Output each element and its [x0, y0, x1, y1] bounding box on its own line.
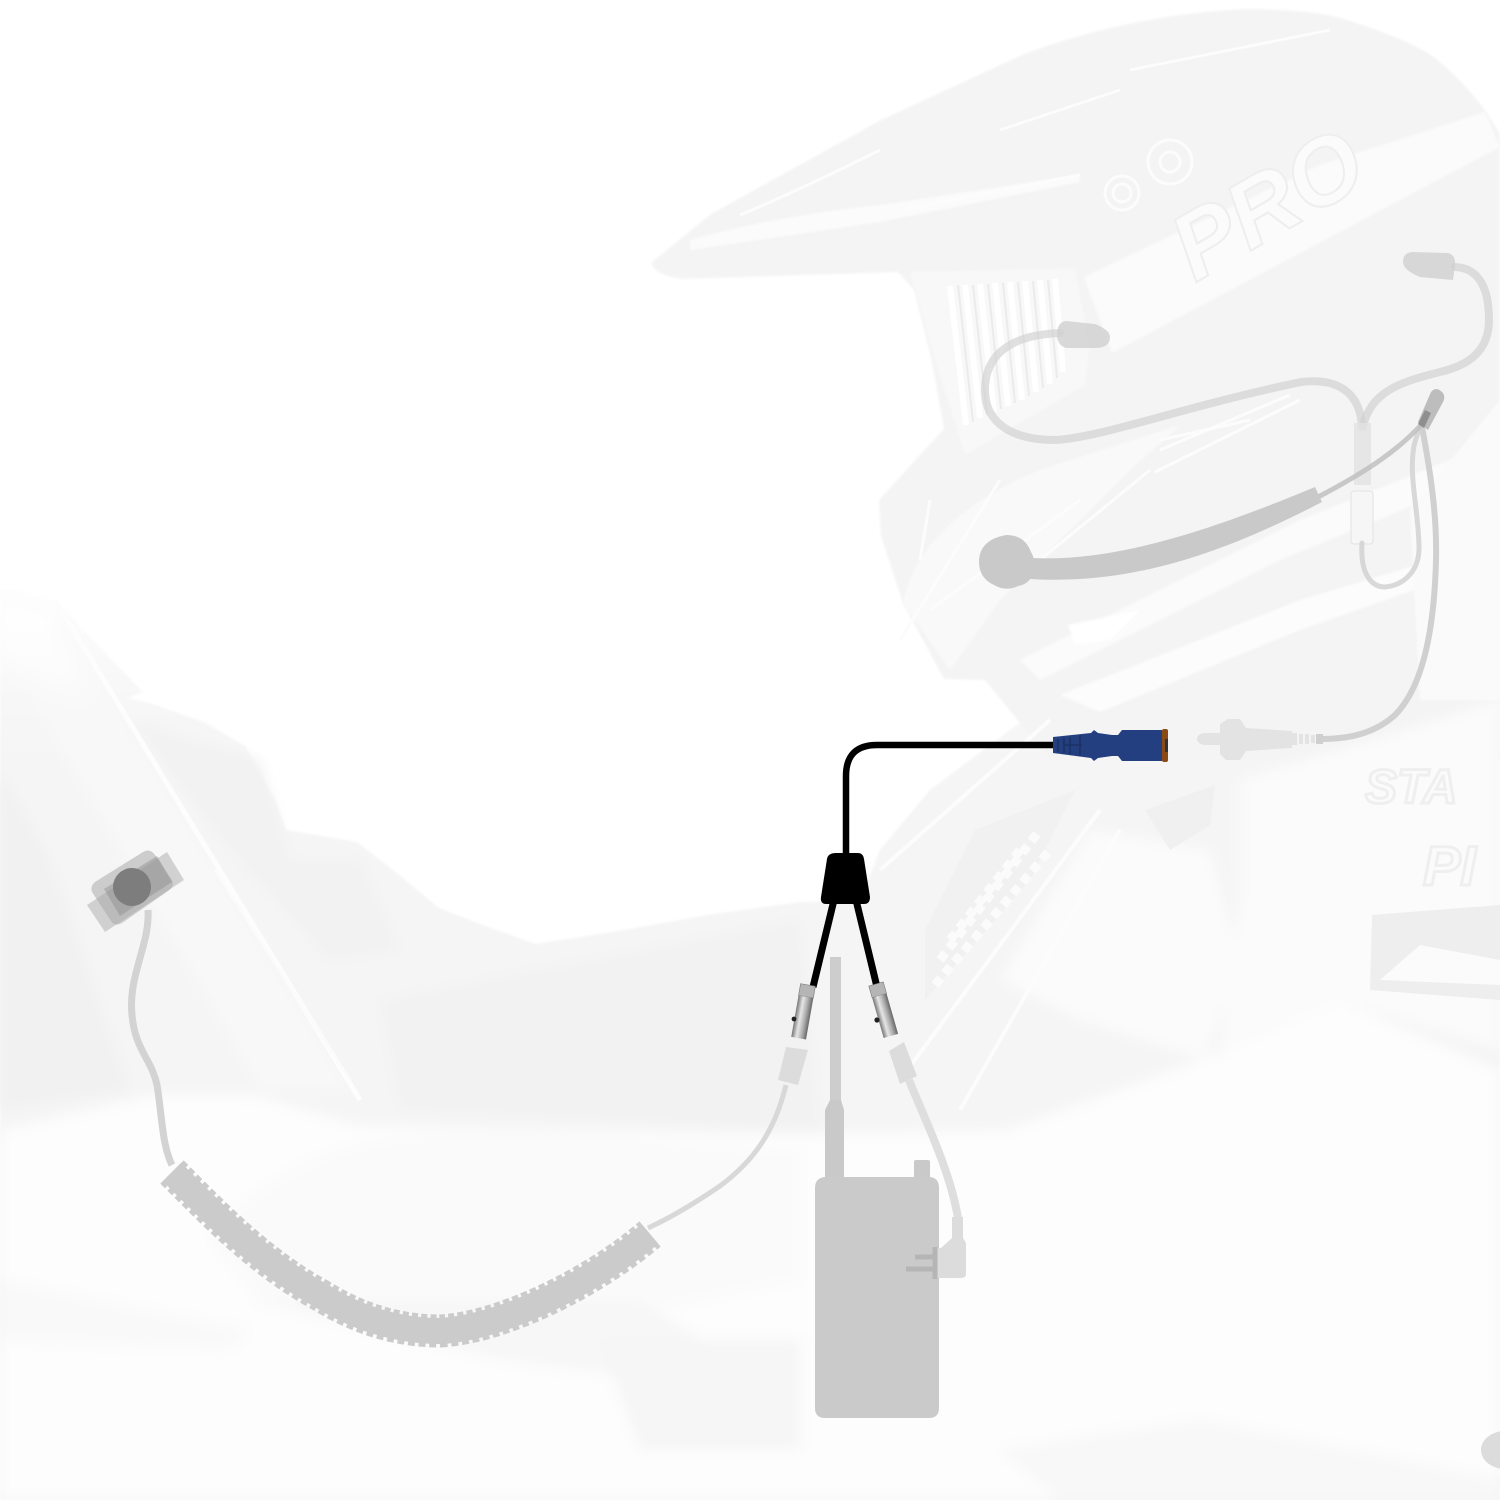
- thin boom wire: [1318, 425, 1421, 497]
- main cable: black Y harness: [791, 745, 1056, 1039]
- right ear foam: [1403, 252, 1455, 280]
- inline connector: [1351, 491, 1373, 544]
- radio knob: [914, 1160, 930, 1180]
- plug pins: [906, 1247, 935, 1279]
- upper cord: [132, 910, 172, 1165]
- button face: [113, 868, 151, 906]
- elbow plug: [935, 1217, 966, 1278]
- helmet rings and lines: [740, 30, 1330, 640]
- Y splitter block: [821, 853, 870, 904]
- suit zip lines: [880, 720, 1120, 1110]
- boom arm: [1030, 487, 1322, 580]
- suit badge: [1370, 905, 1500, 1000]
- shoulder patch: [1145, 785, 1215, 850]
- radio cable: [909, 1080, 958, 1218]
- suit lettering: STA: [1365, 761, 1457, 814]
- coil body: [172, 1172, 650, 1331]
- cropped earpiece at edge: [1481, 1431, 1500, 1469]
- radio body: [815, 1177, 939, 1418]
- left metal connector: [791, 984, 815, 1039]
- helmet grille stripes: [950, 279, 1063, 425]
- black cable: [846, 745, 1056, 858]
- right metal connector: [869, 982, 898, 1038]
- top plug: [889, 1042, 917, 1084]
- top-left fade of wheel: [0, 580, 90, 700]
- coil scallops: [172, 1172, 650, 1331]
- left ear foam: [1057, 321, 1110, 348]
- greyed plug: [1197, 719, 1323, 760]
- greyed headset: in-ear cables: [985, 252, 1489, 739]
- radio: [815, 957, 939, 1418]
- long cable to plug: [1322, 427, 1436, 739]
- button band: [104, 856, 172, 916]
- chest patch: [925, 790, 1075, 1000]
- antenna: [830, 957, 841, 1117]
- antenna base: [825, 1100, 844, 1177]
- button strap: [87, 852, 184, 932]
- right earpiece cable: [1363, 267, 1489, 427]
- left plug: [778, 1047, 808, 1085]
- left branch: [813, 900, 834, 987]
- steering wheel button: [87, 851, 184, 932]
- suit silhouette: [0, 590, 1500, 1500]
- button housing: [91, 851, 173, 925]
- boom mic foam: [979, 535, 1035, 589]
- suit lettering: PI: [1423, 834, 1477, 897]
- right branch: [856, 900, 877, 987]
- lower cord: [648, 1085, 786, 1228]
- left earpiece cable: [985, 333, 1362, 440]
- suit lettering: [1365, 761, 1477, 897]
- helmet badge text: PRO: [1152, 108, 1381, 300]
- cable loop: [1362, 427, 1421, 587]
- wheel rim: [55, 600, 360, 1100]
- radio plug and cable: [889, 1042, 966, 1279]
- locator dots: [874, 1017, 880, 1023]
- helmet silhouette: [651, 9, 1500, 760]
- splitter socket: [1354, 423, 1371, 485]
- tip connector: [1418, 389, 1444, 430]
- suit folds and patches: [0, 610, 1500, 1500]
- coiled cord: [132, 910, 808, 1331]
- helmet details: [690, 112, 1500, 712]
- blue connector: [1053, 729, 1168, 762]
